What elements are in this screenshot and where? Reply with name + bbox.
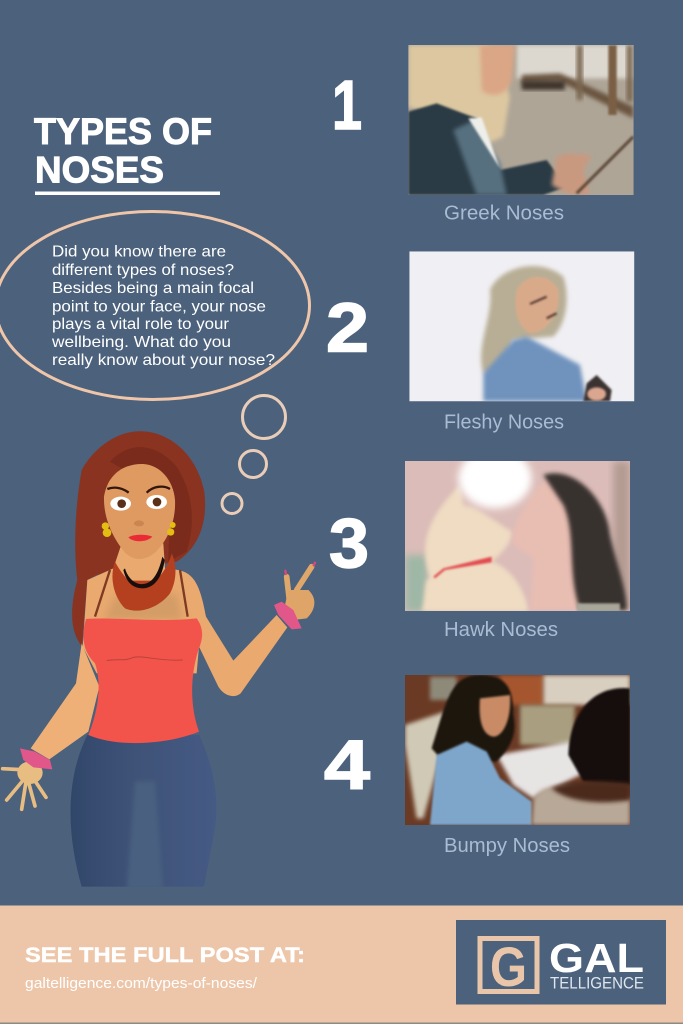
title underline (35, 192, 220, 195)
chest shading (103, 593, 183, 620)
skin: neck, shoulders, right arm (83, 543, 287, 696)
speech bubble: intro text: Did you know there are (52, 244, 226, 260)
speech bubble: intro text: point to your face, your nose (52, 298, 266, 316)
footer band (0, 906, 683, 1024)
speech bubble: intro text: wellbeing. What do you (51, 334, 231, 351)
lips (128, 535, 152, 541)
number 2: 2 (326, 288, 369, 366)
logo: GALtelligence (456, 920, 666, 1004)
pants (70, 735, 216, 887)
skin: left arm (31, 643, 99, 759)
thought bubbles (222, 396, 286, 514)
left hand (3, 761, 46, 809)
eyes (110, 497, 131, 511)
logo: GALtelligence: TELLIGENCE (550, 974, 644, 992)
number 1: 1 (332, 66, 362, 144)
title: NOSES (35, 150, 164, 190)
eyebrows (107, 487, 170, 493)
photo 2: Fleshy noses (409, 251, 634, 401)
top straps (95, 570, 188, 617)
logo mark: G (490, 935, 527, 998)
illustration: woman pointing (3, 431, 315, 893)
scrunchies (274, 602, 302, 629)
photo 4: Bumpy noses (405, 675, 630, 825)
caption: Fleshy Noses: Fleshy Noses (444, 412, 564, 434)
speech bubble: intro text: Besides being a main focal (52, 280, 254, 297)
speech bubble: intro text: plays a vital role to your (52, 316, 229, 333)
footer heading: SEE THE FULL POST AT: (25, 944, 305, 967)
face (104, 464, 175, 559)
nose (134, 520, 144, 526)
photo 3: Hawk noses (405, 448, 630, 612)
scarf (112, 553, 175, 611)
hair (72, 431, 205, 647)
right hand pointing (285, 563, 315, 620)
caption: Hawk Noses: Hawk Noses (444, 619, 558, 641)
red top (83, 618, 202, 743)
logo wordmark: GAL (549, 935, 644, 981)
caption: Bumpy Noses: Bumpy Noses (444, 835, 570, 857)
earrings (102, 522, 176, 537)
number 3: 3 (329, 504, 369, 582)
speech bubble: intro text (0, 212, 310, 400)
title (34, 111, 212, 190)
title: TYPES OF (34, 111, 212, 152)
photo 1: Greek noses (408, 45, 634, 195)
number 4: 4 (324, 726, 370, 804)
speech bubble: intro text: different types of noses? (52, 262, 234, 279)
speech bubble: intro text: really know about your nose? (52, 352, 275, 369)
caption: Greek Noses: Greek Noses (444, 202, 564, 224)
footer url: galtelligence.com/types-of-noses/ (25, 975, 258, 992)
